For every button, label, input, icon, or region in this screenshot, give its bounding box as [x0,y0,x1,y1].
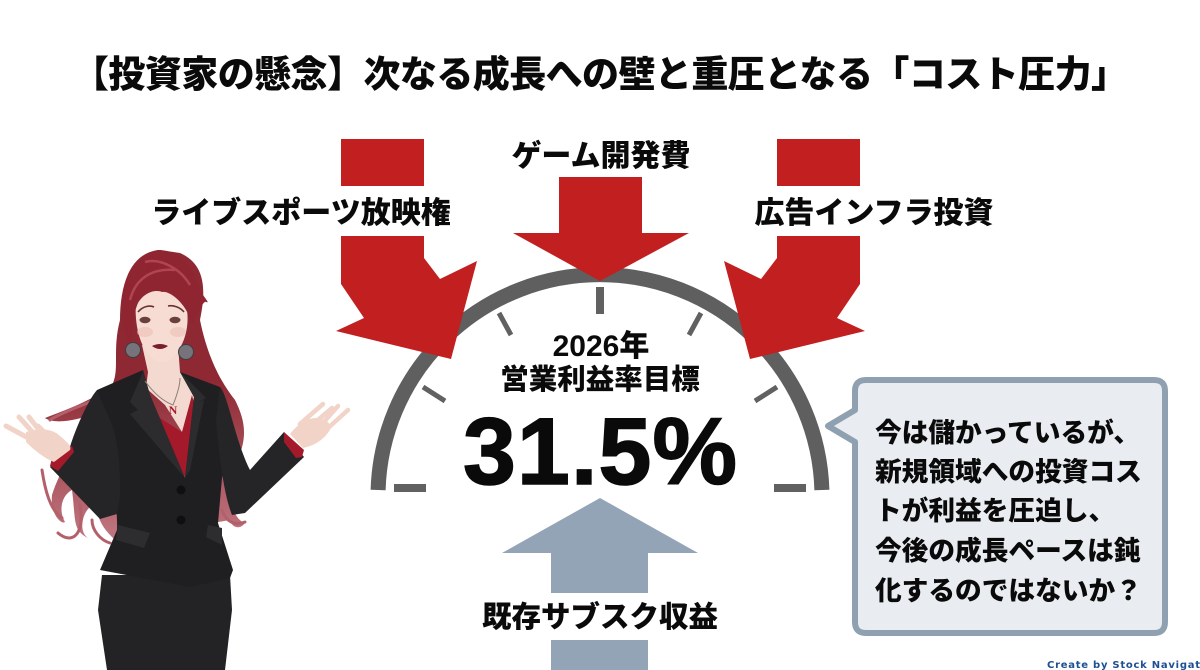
arrow: ad infrastructure [724,139,865,359]
jacket lapels and pockets [130,372,206,478]
blush [137,327,186,337]
left sleeve [50,390,120,519]
label: live sports rights: ライブスポーツ放映権 [151,188,451,232]
skirt [98,575,232,670]
gauge [378,275,822,490]
lower hair strands [42,395,245,543]
bubble text: 新規領域への投資コス [875,450,1142,489]
left hand [6,417,70,462]
front hair [122,250,208,345]
right cuff [284,432,304,458]
eyes [140,317,180,323]
left cuff [50,446,74,471]
right hand [290,404,348,448]
character: businesswoman shrugging [6,250,348,670]
label: ad infrastructure: 広告インフラ投資 [754,188,994,232]
arrow: subscription revenue [502,498,698,670]
gauge ticks [394,287,806,488]
back hair [45,250,245,540]
bubble shape [828,380,1165,633]
bubble text: 今は儲かっているが、 [875,411,1140,450]
gauge caption: operating margin target: 営業利益率目標 [500,357,700,398]
neck and chest [142,345,195,432]
hair highlights [130,261,190,300]
bubble text [875,411,1142,608]
bubble text: トが利益を圧迫し、 [875,489,1115,528]
gauge arc [378,275,822,490]
bubble text: 化するのではないか？ [875,569,1142,608]
jacket body [97,370,233,587]
label: game development: ゲーム開発費 [511,131,691,175]
title: 【投資家の懸念】次なる成長への壁と重圧となる「コスト圧力」 [72,44,1128,98]
jacket buttons [176,486,186,524]
label: subscription revenue: 既存サブスク収益 [482,594,718,636]
red blouse [148,392,200,478]
right sleeve [216,387,304,515]
necklace letter N: N [169,403,178,417]
mouth [152,344,168,349]
necklace [145,378,180,405]
gauge caption: year: 2026年 [553,321,649,365]
arrow: game development [513,177,689,281]
speech bubble [828,380,1165,633]
earrings [126,342,194,360]
face [136,288,188,362]
arrow: live sports rights [336,139,477,359]
bubble text: 今後の成長ペースは鈍 [875,529,1141,568]
big number: 31.5% [463,399,737,505]
eyebrows [138,306,184,312]
